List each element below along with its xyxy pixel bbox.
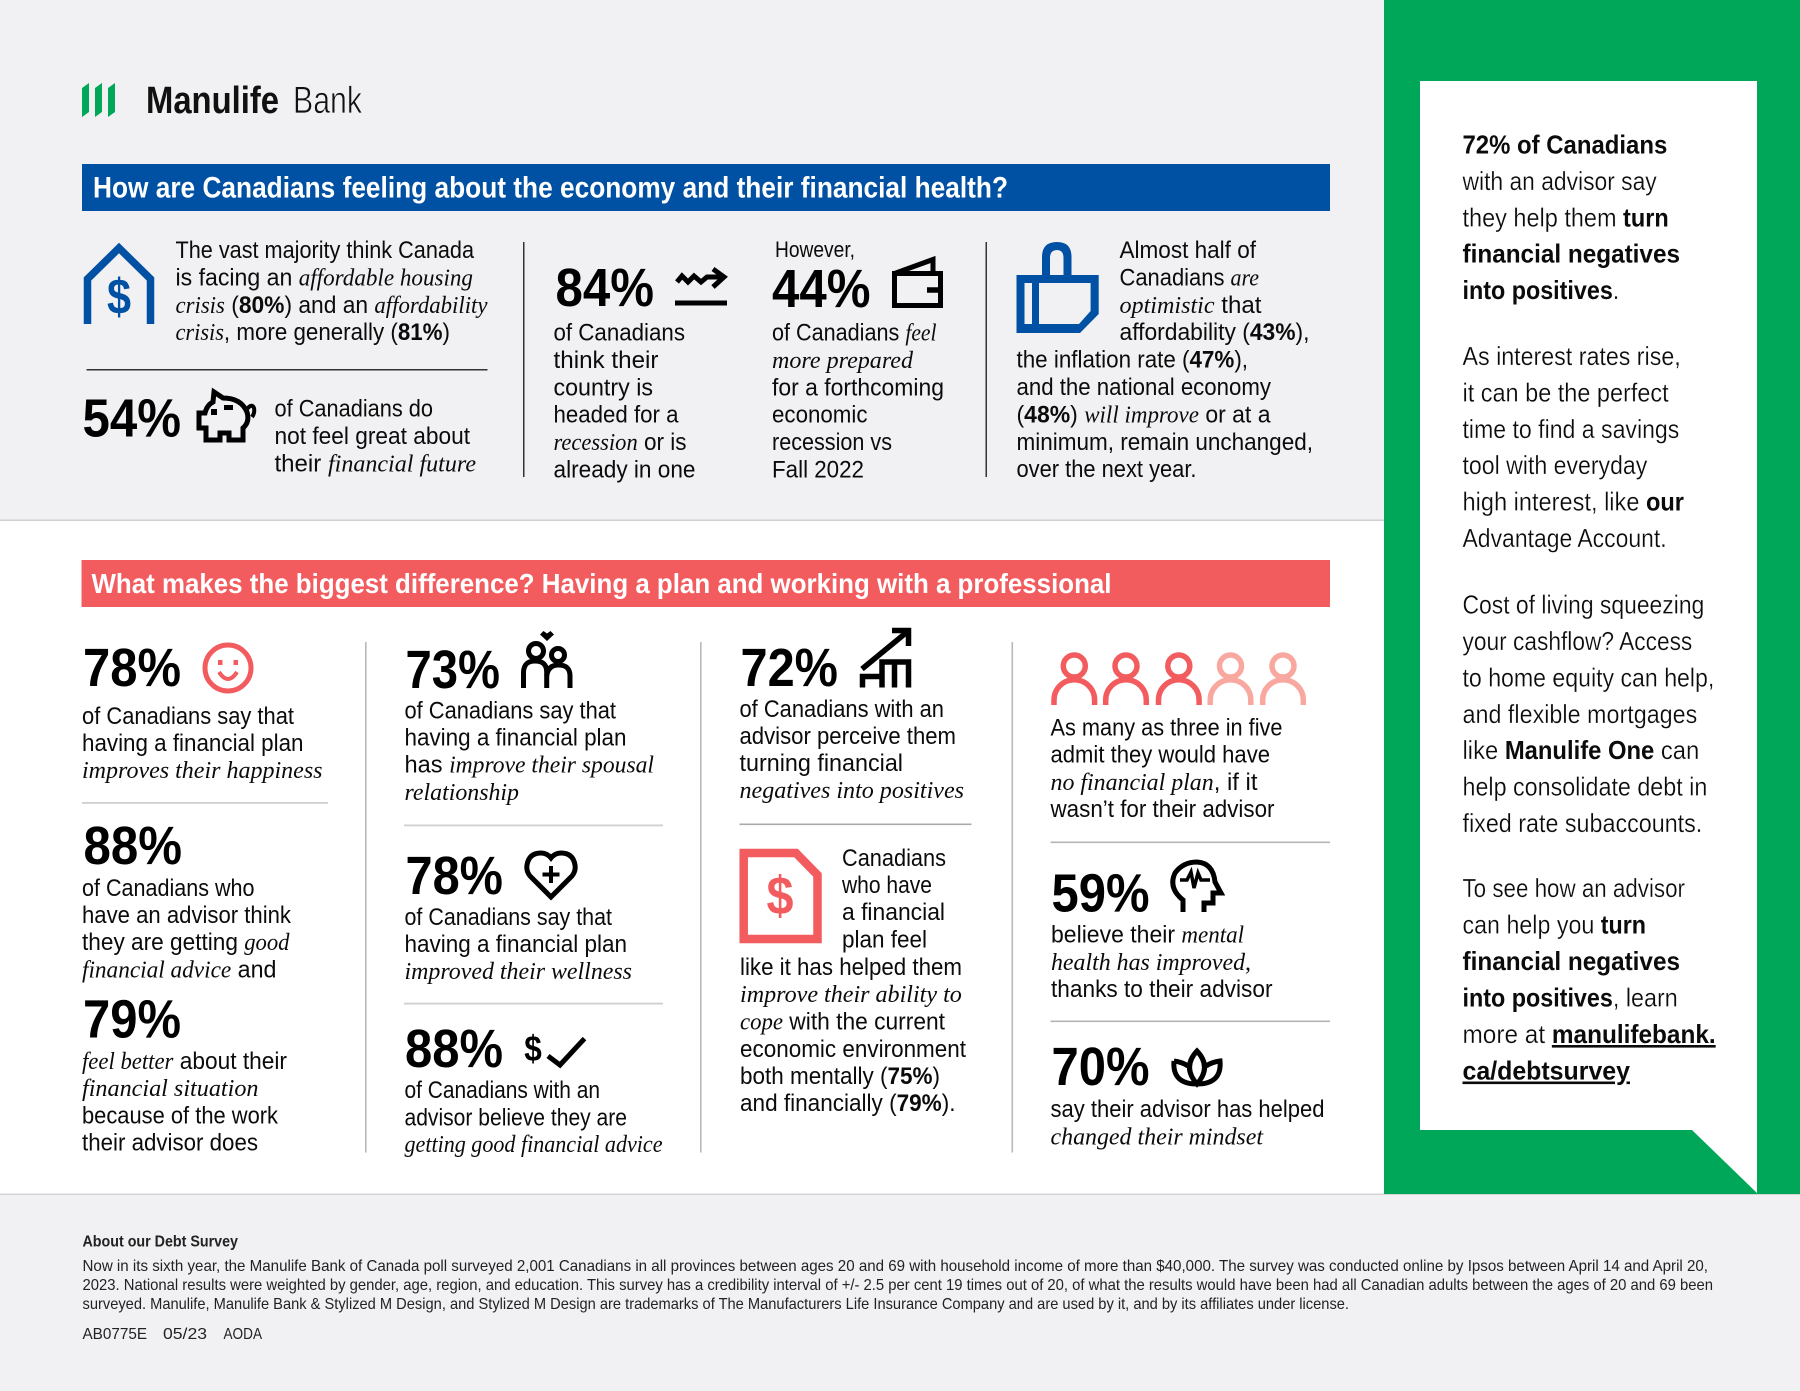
text: spousal relationship: relationship: [404, 780, 519, 806]
text block: optimistic: affordability (43%),: [1120, 319, 1310, 346]
text block: sidebar copy: Cost of living squeezing: [1462, 590, 1704, 620]
text: coping: cope with the current: [740, 1008, 945, 1035]
text block: recession: already in one: [554, 456, 696, 483]
text: coping: [740, 845, 966, 1117]
text: mindset: say their advisor has helped: [1050, 1096, 1324, 1123]
text block: sidebar copy: into positives, learn: [1462, 982, 1678, 1012]
logo: Manulife Bank: [82, 80, 363, 122]
text: negatives into positives: advisor perceive them: [740, 723, 956, 750]
text block: sidebar copy: tool with everyday: [1462, 450, 1647, 480]
text block: recession: [554, 320, 696, 483]
callout: white speech box: [1420, 81, 1757, 1193]
text block: sidebar copy: more at manulifebank.: [1462, 1019, 1716, 1049]
icon: house with dollar sign: [88, 248, 150, 325]
panel: white lower section: [0, 520, 1384, 1194]
text block: recession: headed for a: [554, 402, 679, 429]
footer: about the survey: AB0775E: [82, 1326, 147, 1343]
text block: sidebar copy: your cashflow? Access: [1462, 626, 1692, 656]
footer: about the survey: 2023. National results were weighted by gender, age, region, and education. This survey has a credibility interval of +/- 2.5 per cent 19 times out of 20, of what the results would have been had all Canadian adults between the ages of 20 and 69 been: [82, 1277, 1713, 1294]
text block: optimistic: (48%) will improve or at a: [1016, 401, 1271, 428]
text block: sidebar copy: they help them turn: [1462, 202, 1669, 232]
text block: recession: recession or is: [554, 429, 686, 456]
text: wellness: [404, 904, 632, 985]
icon: dollar and check: $: [524, 1028, 542, 1069]
text: good financial advice: of Canadians with an: [404, 1077, 600, 1104]
icon: thumbs up: [1016, 242, 1099, 333]
stat: 73% spousal: 73%: [406, 640, 500, 700]
footer: about the survey: Now in its sixth year, the Manulife Bank of Canada poll surveyed 2,001 Canadians in all provinces between ages 20 and 69 with household income of more than $40,000. The survey was conducted online by Ipsos between April 14 and April 20,: [82, 1258, 1708, 1275]
text block: recession: country is: [554, 374, 653, 401]
icon: heart with plus: [527, 853, 575, 897]
text block: housing crisis: is facing an affordable housing: [176, 264, 473, 291]
column 1: [82, 638, 328, 1156]
text block: sidebar copy: can help you turn: [1462, 910, 1646, 940]
text block: financial future: not feel great about: [274, 423, 470, 450]
text block: sidebar copy: it can be the perfect: [1462, 378, 1669, 408]
text block: sidebar copy: with an advisor say: [1462, 166, 1657, 196]
text: three in five: no financial plan, if it: [1050, 769, 1258, 796]
text: coping: plan feel: [842, 926, 927, 954]
text: wellness: of Canadians say that: [404, 904, 612, 931]
text: feel better: their advisor does: [82, 1130, 258, 1156]
text: negatives into positives: [740, 696, 964, 804]
text: negatives into positives: turning financial: [740, 750, 903, 777]
stat: 78% happiness: 78%: [83, 638, 181, 698]
text block: sidebar copy: Advantage Account.: [1462, 523, 1667, 553]
text: mental health: believe their mental: [1051, 922, 1244, 948]
text block: sidebar copy: [1462, 130, 1716, 1085]
text: mindset: [1050, 1096, 1324, 1150]
logo: Manulife Bank: Bank: [293, 80, 363, 122]
text block: optimistic: minimum, remain unchanged,: [1016, 429, 1313, 456]
text block: financial future: of Canadians do: [274, 396, 433, 422]
text: mental health: thanks to their advisor: [1051, 976, 1272, 1003]
text block: more prepared: economic: [772, 402, 868, 429]
stat: 59% mental health: 59%: [1052, 864, 1150, 924]
icon: wallet: [894, 260, 943, 306]
icon: lotus: [1174, 1051, 1220, 1084]
text block: more prepared: [772, 320, 944, 483]
text: coping: who have: [841, 872, 932, 899]
text: wellness: having a financial plan: [404, 931, 627, 958]
text block: financial future: their financial future: [274, 450, 476, 478]
text: happiness: improves their happiness: [82, 758, 322, 784]
text block: sidebar copy: As interest rates rise,: [1462, 341, 1681, 371]
text: three in five: wasn’t for their advisor: [1050, 796, 1275, 823]
text block: recession: of Canadians: [554, 320, 685, 346]
text block: sidebar copy: high interest, like our: [1462, 486, 1684, 516]
icon: couple with heart: [524, 631, 570, 688]
text: feel better: feel better about their: [82, 1048, 287, 1075]
text block: housing crisis: crisis (80%) and an affordability: [176, 292, 488, 319]
text: happiness: of Canadians say that: [82, 703, 294, 730]
text: coping: a financial: [842, 899, 945, 926]
text block: housing crisis: crisis, more generally (81%): [176, 319, 450, 346]
footer: about the survey: [82, 1234, 1713, 1343]
text block: optimistic: the inflation rate (47%),: [1016, 347, 1248, 374]
icon: piggy bank: [199, 392, 254, 440]
text block: more prepared: for a forthcoming: [772, 374, 944, 401]
text block: more prepared: recession vs: [772, 429, 892, 456]
stat: 70% mindset: 70%: [1052, 1037, 1150, 1097]
text: coping: economic environment: [740, 1036, 966, 1063]
text block: optimistic: Almost half of: [1120, 237, 1256, 264]
text: spousal relationship: [404, 697, 654, 806]
text: three in five: [1050, 714, 1282, 823]
text: wellness: improved their wellness: [404, 959, 632, 985]
text block: optimistic: optimistic that: [1120, 292, 1262, 319]
stat: 84%: 84%: [556, 258, 654, 318]
text block: sidebar copy: help consolidate debt in: [1462, 772, 1707, 802]
text: three in five: As many as three in five: [1050, 714, 1282, 742]
icon: five people, three highlighted: [1054, 655, 1303, 705]
text: good financial advice: getting good financial advice: [404, 1132, 663, 1158]
text block: sidebar copy: To see how an advisor: [1462, 873, 1685, 903]
heading: biggest difference: [82, 560, 1330, 607]
text: spousal relationship: of Canadians say that: [404, 697, 616, 724]
icon: growth chart with arrow: [862, 630, 908, 688]
text block: optimistic: over the next year.: [1016, 456, 1196, 483]
text: good financial advice: they are getting good: [82, 929, 290, 956]
text block: sidebar copy: ca/debtsurvey: [1462, 1056, 1631, 1086]
text: coping: improve their ability to: [740, 982, 962, 1008]
heading: economy and financial health: [82, 164, 1330, 211]
column 4: [1050, 655, 1330, 1150]
text: mental health: [1051, 922, 1272, 1003]
text: spousal relationship: having a financial plan: [404, 724, 626, 751]
footer: about the survey: AODA: [224, 1326, 262, 1343]
text block: more prepared: Fall 2022: [772, 456, 864, 483]
text block: sidebar copy: financial negatives: [1462, 239, 1680, 269]
stat: 44%: 44%: [772, 259, 870, 319]
text block: sidebar copy: into positives.: [1462, 275, 1619, 305]
text block: sidebar copy: time to find a savings: [1462, 414, 1679, 444]
text block: sidebar copy: financial negatives: [1462, 946, 1680, 976]
text: negatives into positives: of Canadians with an: [740, 696, 944, 723]
text: good financial advice: have an advisor think: [82, 902, 292, 929]
text: feel better: [82, 1048, 287, 1156]
text block: more prepared: more prepared: [772, 348, 914, 374]
text: However: However,: [775, 237, 855, 262]
text: good financial advice: [404, 1077, 663, 1158]
heading: biggest difference: What makes the biggest difference? Having a plan and working with a professional: [92, 568, 1112, 599]
icon: document with dollar: [744, 853, 818, 939]
text block: financial future: [274, 396, 476, 478]
text block: recession: think their: [554, 347, 658, 374]
stat: 79% feel better: 79%: [83, 990, 181, 1050]
icon: document with dollar: $: [766, 866, 794, 926]
text: happiness: having a financial plan: [82, 730, 304, 757]
text: good financial advice: of Canadians who: [82, 875, 254, 902]
text block: sidebar copy: to home equity can help,: [1462, 662, 1714, 692]
text block: optimistic: Canadians are: [1120, 264, 1259, 291]
icon: house with dollar sign: $: [107, 269, 131, 325]
footer: about the survey: 05/23: [163, 1326, 207, 1343]
text: good financial advice: financial advice and: [82, 956, 276, 984]
stat: 78% wellness: 78%: [406, 846, 503, 906]
text block: housing crisis: The vast majority think Canada: [176, 237, 475, 264]
text block: sidebar copy: 72% of Canadians: [1462, 130, 1667, 160]
column 2: [404, 631, 663, 1158]
logo: Manulife Bank: Manulife: [146, 80, 279, 122]
text: coping: like it has helped them: [740, 954, 962, 981]
footer: about the survey: surveyed. Manulife, Manulife Bank & Stylized M Design, and Stylized M Design are trademarks of The Manufacturers Life Insurance Company and are used by it, and by its affiliates under license.: [82, 1296, 1349, 1313]
text: feel better: financial situation: [82, 1076, 258, 1102]
stat: 72% negatives: 72%: [740, 638, 838, 698]
text: mindset: changed their mindset: [1050, 1124, 1264, 1150]
stat: 88% advisor advice: 88%: [405, 1019, 503, 1079]
text block: sidebar copy: fixed rate subaccounts.: [1462, 808, 1702, 838]
text block: sidebar copy: like Manulife One can: [1462, 735, 1699, 765]
stat: 88% good advice: 88%: [84, 816, 182, 876]
text: spousal relationship: has improve their spousal: [404, 751, 654, 778]
text: coping: Canadians: [842, 845, 946, 872]
footer: about the survey: About our Debt Survey: [82, 1234, 238, 1250]
text: three in five: admit they would have: [1050, 742, 1270, 768]
text: coping: both mentally (75%): [740, 1063, 940, 1090]
text block: optimistic: [1016, 237, 1313, 483]
text: good financial advice: advisor believe they are: [404, 1104, 627, 1132]
panel: green sidebar: [1384, 0, 1800, 1194]
icon: head with pulse: [1173, 862, 1221, 912]
text: mental health: health has improved,: [1051, 950, 1251, 976]
text: feel better: because of the work: [82, 1102, 279, 1130]
text: happiness: [82, 703, 322, 784]
icon: smiley face: [205, 645, 251, 691]
icon: dollar and check: [524, 1028, 584, 1069]
heading: economy and financial health: How are Canadians feeling about the economy and their financial health?: [93, 172, 1008, 204]
text block: optimistic: and the national economy: [1016, 374, 1271, 401]
text block: sidebar copy: and flexible mortgages: [1462, 699, 1697, 729]
stat: 54%: 54%: [82, 388, 181, 448]
column 3: [740, 630, 972, 1117]
text: coping: and financially (79%).: [740, 1090, 955, 1117]
text: good financial advice: [82, 875, 292, 984]
text block: more prepared: of Canadians feel: [772, 320, 937, 346]
text block: housing crisis: [176, 237, 488, 346]
text: negatives into positives: negatives into positives: [740, 778, 964, 804]
icon: zigzag arrow over line: [675, 269, 727, 306]
